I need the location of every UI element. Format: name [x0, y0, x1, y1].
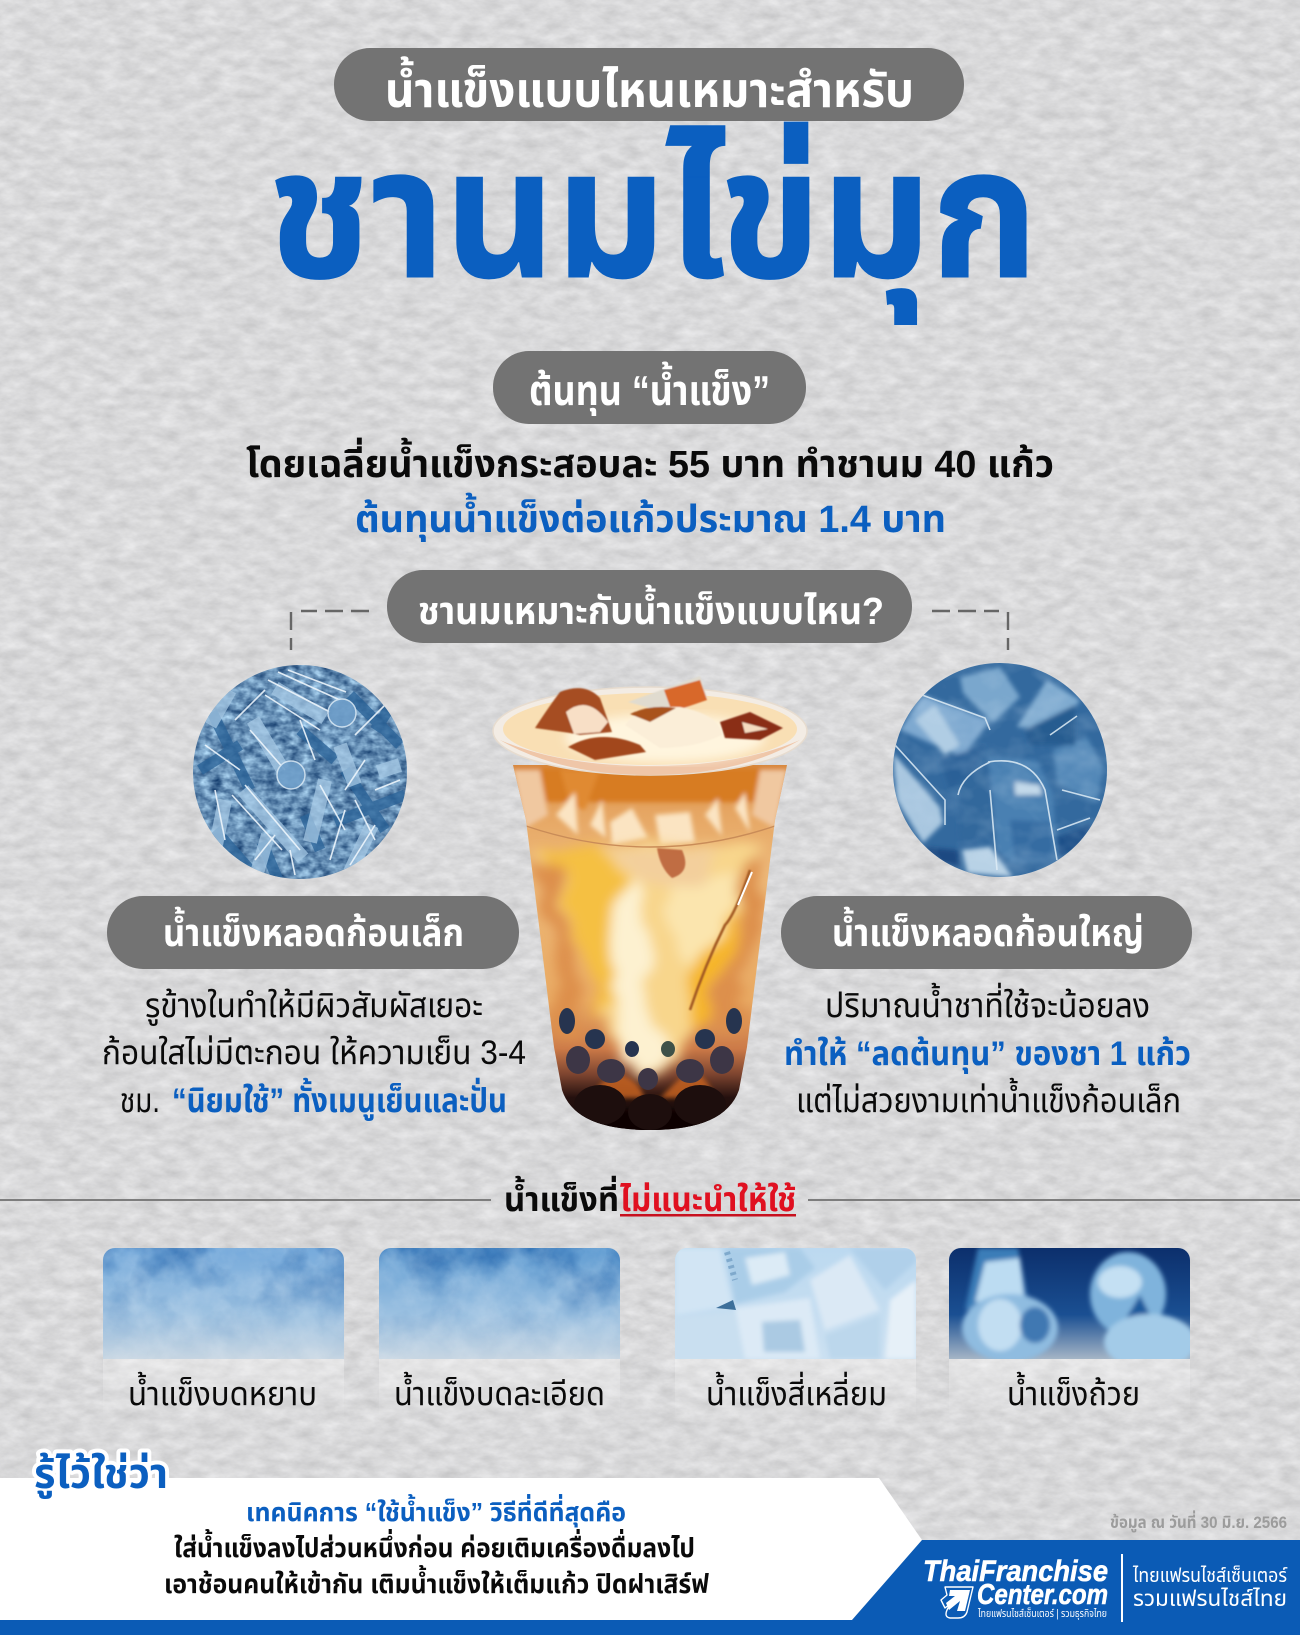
icon: arrow — [941, 1587, 973, 1618]
label: น้ำแข็งสี่เหลี่ยม — [706, 1371, 887, 1412]
step of the cup — [526, 826, 775, 847]
connector right — [932, 611, 1008, 650]
tile: fine crushed ice — [379, 1248, 620, 1421]
cost text line 1: โดยเฉลี่ยน้ำแข็งกระสอบละ 55 บาท ทำชานม 40 แก้ว — [246, 437, 1054, 486]
text block: small tube ice description: ก้อนใสไม่มีตะกอน ให้ความเย็น 3-4 — [102, 1034, 526, 1072]
text block: small tube ice description: “นิยมใช้” ทั้งเมนูเย็นและปั่น — [172, 1077, 507, 1121]
label: น้ำแข็งบดหยาบ — [128, 1371, 317, 1412]
heading: not recommended ice: ไม่แนะนำให้ใช้ — [620, 1181, 796, 1219]
pill: ต้นทุนน้ำแข็ง — [493, 351, 806, 424]
cost text line 2: ต้นทุนน้ำแข็งต่อแก้วประมาณ 1.4 บาท — [355, 492, 946, 542]
cream swirl — [530, 842, 772, 1065]
tile: square ice — [675, 1248, 916, 1421]
divider left — [0, 1199, 491, 1201]
pill: small tube ice — [107, 896, 519, 969]
text block: large tube ice description: แต่ไม่สวยงามเท่าน้ำแข็งก้อนเล็ก — [796, 1077, 1181, 1120]
main title: ชานมไข่มุก: ชานมไข่มุก — [268, 112, 1038, 324]
cup rim — [493, 687, 807, 775]
pill: large tube ice: น้ำแข็งหลอดก้อนใหญ่ — [832, 906, 1144, 955]
panel: did you know — [0, 1450, 922, 1620]
tip line 2: ใส่น้ำแข็งลงไปส่วนหนึ่งก่อน ค่อยเติมเครื่องดื่มลงไป — [174, 1529, 695, 1563]
label: น้ำแข็งถ้วย — [1007, 1371, 1140, 1412]
milk foam on top — [565, 714, 765, 762]
tea band — [513, 768, 787, 845]
image: bubble milk tea cup — [493, 676, 807, 1135]
tile: cup ice — [949, 1248, 1190, 1406]
heading: รู้ไว้ใช่ว่า: รู้ไว้ใช่ว่า — [34, 1450, 168, 1499]
text block: small tube ice description: ชม. — [120, 1082, 160, 1120]
label: น้ำแข็งบดละเอียด — [394, 1371, 605, 1412]
title pill: น้ำแข็งแบบไหนเหมาะสำหรับ: น้ำแข็งแบบไหนเหมาะสำหรับ — [385, 56, 914, 118]
pill: small tube ice: น้ำแข็งหลอดก้อนเล็ก — [163, 906, 464, 955]
divider right — [808, 1199, 1300, 1201]
logo: ThaiFranchise Center: ThaiFranchise — [923, 1555, 1108, 1588]
text block: large tube ice description — [784, 982, 1191, 1120]
pill: ชานมเหมาะกับน้ำแข็งแบบไหน: ชานมเหมาะกับน้ำแข็งแบบไหน? — [418, 584, 884, 633]
pill: ชานมเหมาะกับน้ำแข็งแบบไหน — [387, 570, 912, 643]
image: large tube ice — [893, 663, 1107, 877]
bottom web — [580, 1074, 721, 1130]
pill: large tube ice — [781, 896, 1192, 969]
connector left — [291, 611, 369, 650]
logo: ThaiFranchise Center — [923, 1555, 1108, 1620]
text block: small tube ice description — [102, 987, 526, 1121]
footer band — [0, 1540, 1300, 1635]
pill: ต้นทุนน้ำแข็ง: ต้นทุน “น้ำแข็ง” — [529, 361, 770, 416]
logo divider — [1121, 1554, 1123, 1622]
heading: not recommended ice — [504, 1175, 796, 1219]
title pill: น้ำแข็งแบบไหนเหมาะสำหรับ — [334, 48, 964, 121]
text block: large tube ice description: ทำให้ “ลดต้นทุน” ของชา 1 แก้ว — [784, 1035, 1191, 1074]
logo: ThaiFranchise Center: Center.com — [977, 1579, 1108, 1611]
image: small tube ice — [193, 665, 407, 880]
ice cubes on top — [535, 676, 783, 760]
logo: ThaiFranchise Center: ไทยแฟรนไชส์เซ็นเตอร์ | รวมธุรกิจไทย — [977, 1608, 1107, 1620]
text block: large tube ice description: ปริมาณน้ำชาที่ใช้จะน้อยลง — [825, 982, 1150, 1025]
tip line 3: เอาช้อนคนให้เข้ากัน เติมน้ำแข็งให้เต็มแก้ว ปิดฝาเสิร์ฟ — [164, 1565, 710, 1599]
heading: not recommended ice: น้ำแข็งที่ — [504, 1175, 619, 1219]
tile: coarse crushed ice — [103, 1248, 344, 1421]
logo text right — [1132, 1565, 1288, 1611]
text block: small tube ice description: รูข้างในทำให้มีผิวสัมผัสเยอะ — [145, 987, 483, 1026]
logo text right: รวมแฟรนไชส์ไทย — [1133, 1586, 1287, 1611]
tip line 1: เทคนิคการ “ใช้น้ำแข็ง” วิธีที่ดีที่สุดคือ — [246, 1494, 626, 1528]
tapioca pearls — [559, 1008, 742, 1057]
